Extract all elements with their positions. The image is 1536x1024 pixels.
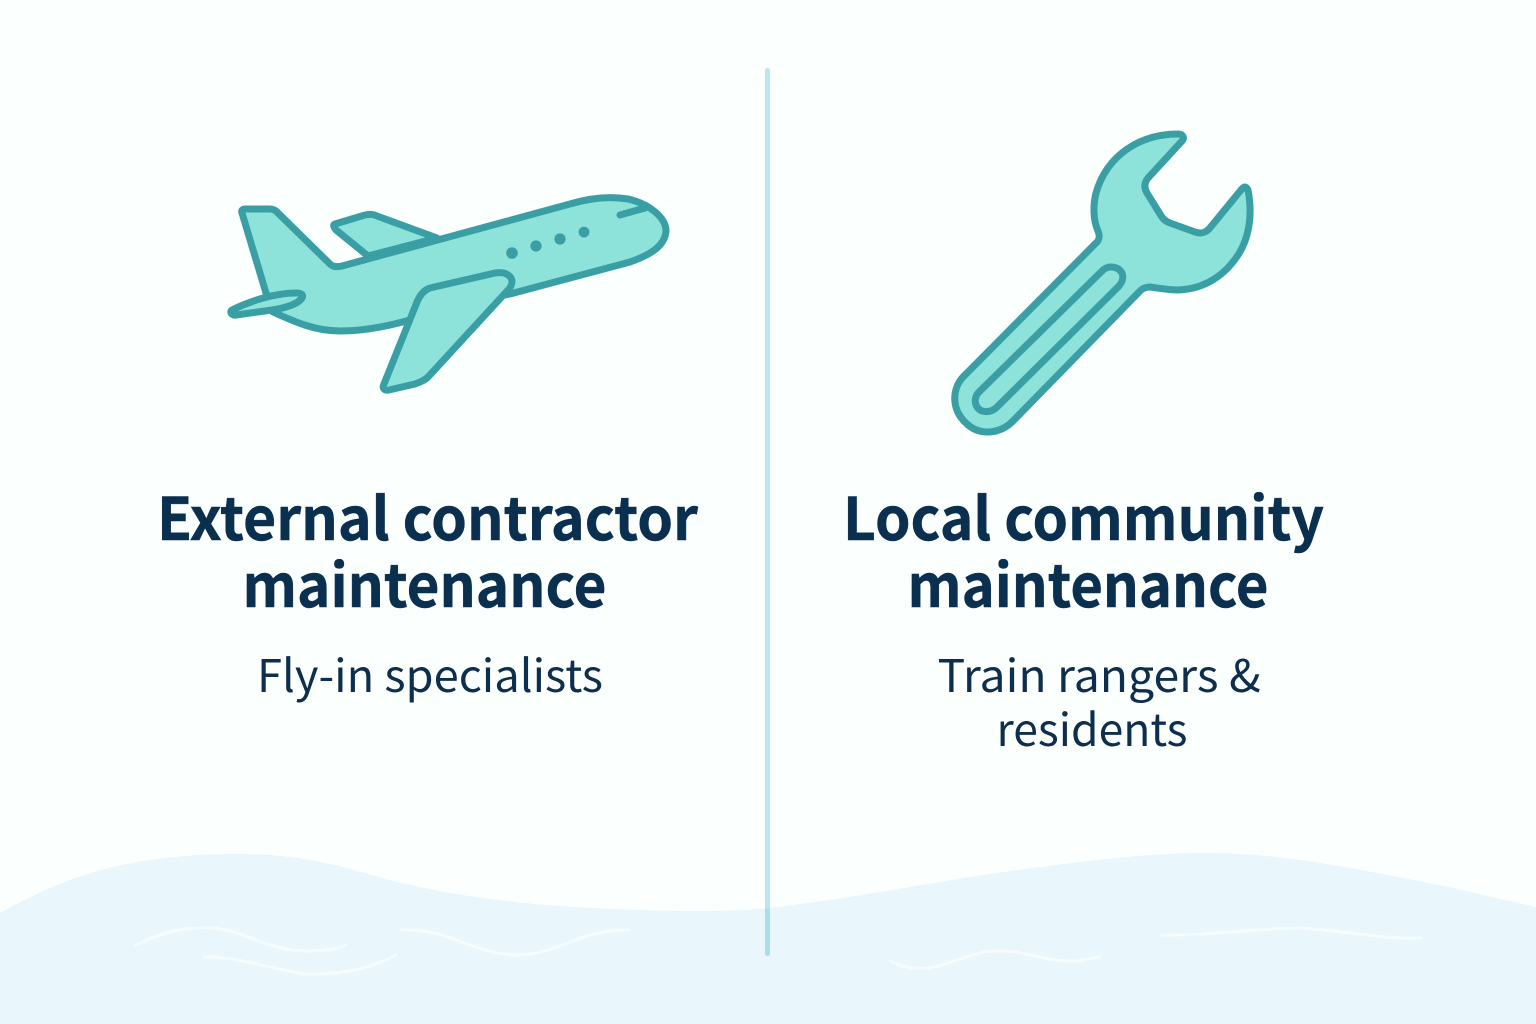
icon: wrench <box>955 134 1250 432</box>
windows <box>506 227 589 259</box>
subtitle: Fly-in specialists <box>257 640 603 705</box>
heading: Local community <box>843 472 1324 557</box>
handle slot <box>975 267 1123 412</box>
subtitle: Train rangers & <box>938 640 1260 705</box>
water wave band <box>0 853 1536 1024</box>
cockpit line <box>620 208 645 215</box>
center divider <box>765 68 770 956</box>
ripple lines <box>136 928 1421 974</box>
panel: local community maintenance: maintenance <box>908 539 1268 624</box>
panel: local community maintenance <box>843 134 1324 759</box>
icon: airplane <box>231 198 666 390</box>
panel: local community maintenance: residents <box>996 694 1188 759</box>
heading: External contractor <box>157 472 698 557</box>
panel: external contractor maintenance <box>157 198 698 705</box>
panel: external contractor maintenance: maintenance <box>242 539 606 624</box>
